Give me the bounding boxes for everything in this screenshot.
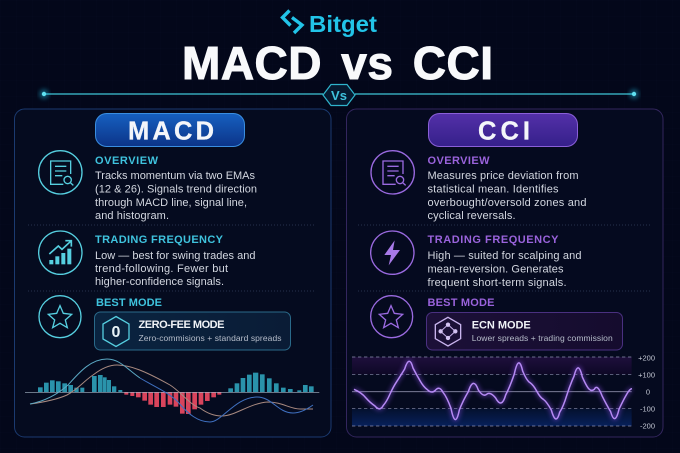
icon: zero hexagon: 0 [112, 324, 121, 341]
chart: CCI oscillator: 0 [646, 388, 650, 396]
overview text: overbought/oversold zones and [428, 197, 586, 209]
overview text: OVERVIEW [428, 155, 490, 167]
card: zero-fee mode: Zero-commisions + standard spreads [138, 333, 282, 343]
icon: lightning bolt [371, 231, 414, 274]
chart: CCI oscillator [352, 354, 655, 430]
icon: document search [39, 151, 82, 194]
chart: CCI oscillator: +100 [638, 370, 655, 380]
overview text: cyclical reversals. [428, 210, 516, 222]
panel: MACD [14, 109, 331, 437]
CCI heading pill [428, 114, 578, 146]
trading frequency text [95, 234, 256, 288]
icon: star [371, 296, 413, 338]
overview text: Tracks momentum via two EMAs [95, 170, 256, 182]
overview text: statistical mean. Identifies [428, 184, 559, 196]
trading frequency text: higher-confidence signals. [95, 276, 224, 288]
best mode heading: BEST MODE [428, 297, 494, 309]
logo: Bitget: Bitget [309, 11, 377, 37]
overview text: and histogram. [95, 210, 169, 222]
chart: CCI oscillator: -100 [640, 404, 655, 414]
overview text: OVERVIEW [95, 155, 159, 167]
icon: zero hexagon [103, 316, 129, 346]
logo: Bitget [282, 10, 377, 37]
trading frequency text: mean-reversion. Generates [428, 264, 564, 276]
trading frequency text: TRADING FREQUENCY [428, 234, 559, 246]
card: zero-fee mode [94, 312, 290, 350]
chart: CCI oscillator: +200 [638, 354, 655, 362]
overview text [428, 155, 586, 222]
card: ECN mode: Lower spreads + trading commission [472, 333, 613, 343]
chart: MACD histogram and lines [25, 359, 319, 422]
trading frequency text: trend-following. Fewer but [95, 263, 228, 275]
title: MACD vs CCI [182, 37, 493, 89]
chart: CCI oscillator: -200 [640, 422, 655, 430]
overview text: Measures price deviation from [428, 170, 578, 182]
trading frequency text: TRADING FREQUENCY [95, 234, 224, 246]
overview text: through MACD line, signal line, [95, 197, 247, 209]
overview text: (12 & 26). Signals trend direction [95, 184, 257, 196]
card: ECN mode: ECN MODE [472, 320, 531, 332]
icon: star [39, 296, 81, 338]
trading frequency text: Low — best for swing trades and [95, 250, 256, 262]
divider with Vs badge [39, 84, 639, 106]
MACD heading pill: MACD [128, 118, 214, 146]
best mode heading: BEST MODE [96, 297, 162, 309]
card: zero-fee mode: ZERO-FEE MODE [138, 319, 224, 331]
divider with Vs badge: Vs [331, 88, 347, 103]
CCI heading pill: CCI [478, 118, 530, 146]
overview text [95, 155, 257, 222]
card: ECN mode [426, 312, 622, 350]
panel: CCI [346, 109, 663, 437]
icon: ECN network hexagon [435, 317, 461, 346]
icon: document search [371, 151, 414, 194]
trading frequency text [428, 234, 582, 289]
trading frequency text: High — suited for scalping and [428, 250, 582, 262]
trading frequency text: frequent short-term signals. [428, 277, 566, 289]
icon: rising bars [39, 231, 82, 274]
MACD heading pill [96, 114, 244, 146]
